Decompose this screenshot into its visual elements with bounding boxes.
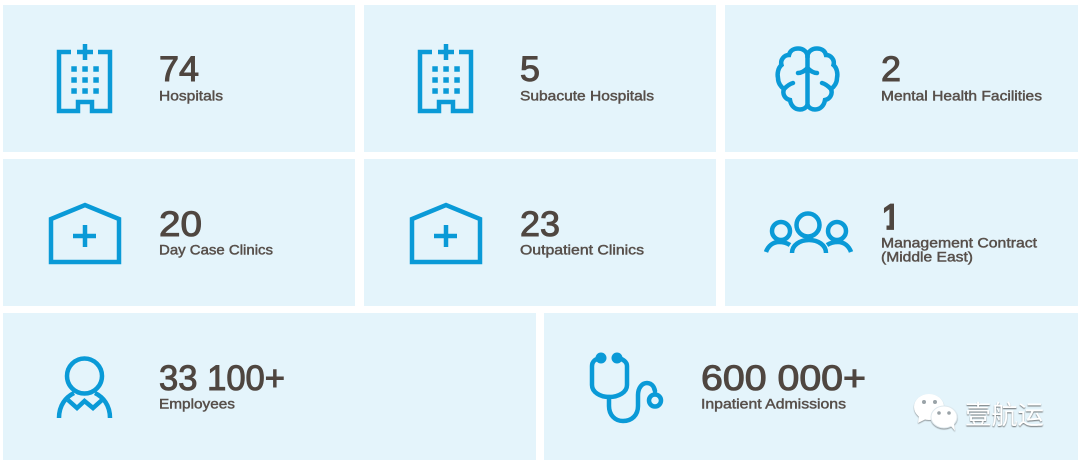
panel: hospitals xyxy=(3,5,355,152)
label: subacute hospitals: Subacute Hospitals xyxy=(520,88,654,104)
number: 74: 74 xyxy=(159,50,199,89)
number: 33 100+: 33 100+ xyxy=(159,359,285,398)
number: 23: 23 xyxy=(520,205,560,244)
panel: day case clinics xyxy=(3,159,355,306)
watermark xyxy=(914,394,1044,431)
panel: subacute hospitals xyxy=(364,5,716,152)
icon: day clinic house xyxy=(51,205,119,262)
panel: employees xyxy=(3,313,536,460)
panel: outpatient clinics xyxy=(364,159,716,306)
label: employees: Employees xyxy=(159,396,235,412)
icon: hospital building xyxy=(59,44,110,111)
icon: brain xyxy=(778,48,837,110)
icon: outpatient clinic house xyxy=(412,205,480,262)
label: mental health facilities: Mental Health Facilities xyxy=(881,88,1042,104)
panel: mental health facilities xyxy=(725,5,1078,152)
icon: person xyxy=(59,358,110,418)
panel: inpatient admissions xyxy=(544,313,1078,460)
label: inpatient admissions: Inpatient Admissions xyxy=(701,396,846,412)
label: day case clinics: Day Case Clinics xyxy=(159,242,273,258)
label: outpatient clinics: Outpatient Clinics xyxy=(520,242,644,258)
icon: subacute hospital building xyxy=(420,44,471,111)
number: 1: 1 xyxy=(882,198,901,237)
panel: management contract xyxy=(725,159,1078,306)
number: 600 000+: 600 000+ xyxy=(701,359,866,398)
number: 2: 2 xyxy=(881,50,901,89)
watermark text: 壹航运 xyxy=(965,400,1044,430)
icon: chat bubbles xyxy=(914,394,957,431)
number: 5: 5 xyxy=(520,50,540,89)
label: management contract middle east: (Middle East) xyxy=(881,248,973,264)
label: management contract middle east: Management Contract xyxy=(881,234,1037,250)
icon: stethoscope xyxy=(592,352,661,421)
label: hospitals: Hospitals xyxy=(159,88,223,104)
number: 20: 20 xyxy=(159,205,202,244)
icon: group of people xyxy=(766,214,851,253)
